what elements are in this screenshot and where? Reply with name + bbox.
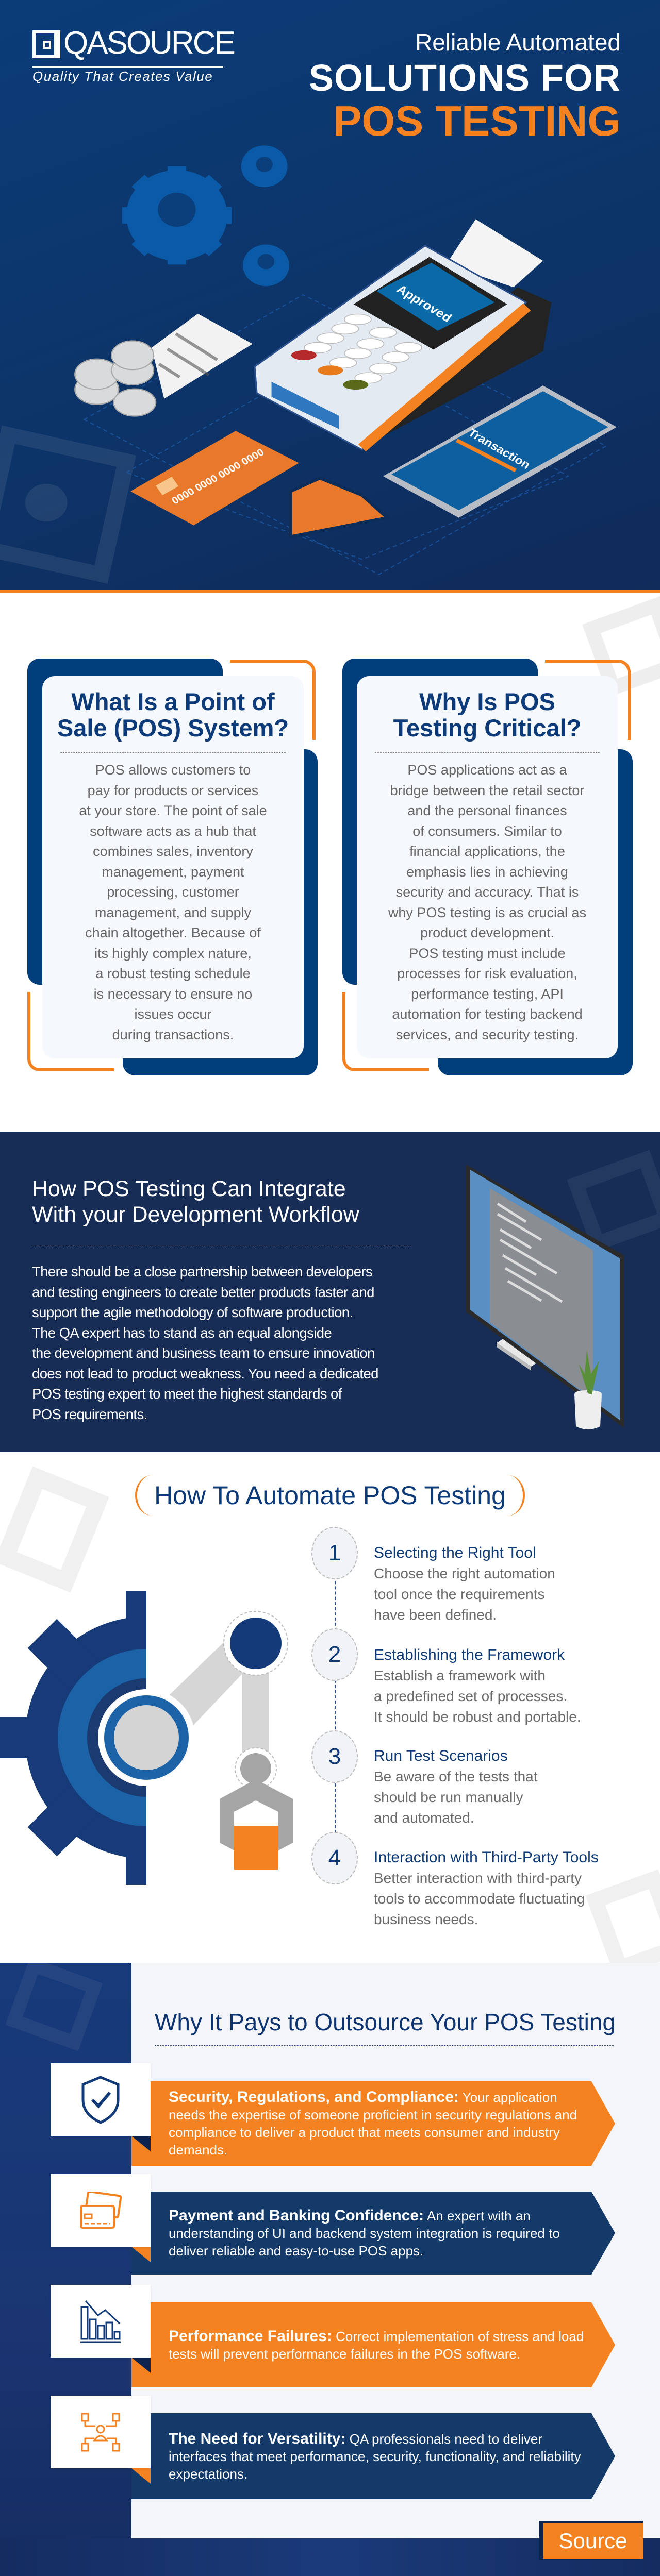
step 4: business needs. [374,1911,478,1927]
text block: why POS testing is as crucial as [388,905,586,920]
section: integrate workflow [0,1132,660,1452]
heading: Why It Pays to Outsource Your POS Testing [155,2009,616,2035]
step 1: 1 [328,1540,341,1565]
row: payment [51,2174,615,2275]
text block: a robust testing schedule [95,966,251,981]
text block: automation for testing backend [392,1006,583,1022]
text block: software acts as a hub that [90,823,256,839]
text block: issues occur [134,1006,212,1022]
step 2: Establishing the Framework [374,1646,565,1663]
row: security [51,2063,615,2166]
row: payment: Payment and Banking Confidence: An expert with an understanding of UI and backend system integration is required to deliver reliable and easy-to-use POS apps. [169,2207,560,2258]
step 1: Choose the right automation [374,1565,555,1581]
text block [32,1264,378,1422]
step 3: and automated. [374,1810,474,1826]
text block: the development and business team to ensure innovation [32,1345,375,1361]
watermark [582,596,660,697]
step 1 [311,1527,555,1623]
icon: shield check [51,2063,151,2136]
text block: processing, customer [107,884,239,900]
text block: services, and security testing. [396,1026,579,1042]
icon: network [51,2396,151,2468]
text block: and the personal finances [407,803,567,818]
text block: chain altogether. Because of [85,925,261,940]
title: POS TESTING [333,97,621,145]
step 1: have been defined. [374,1607,497,1623]
hero illustration: Approved [394,282,454,325]
logo [32,25,234,84]
receipt and coins [152,314,253,399]
text block: POS testing must include [409,945,566,961]
step 3: should be run manually [374,1789,523,1805]
step 2: 2 [328,1642,341,1667]
hero illustration: 0000 0000 0000 0000 [170,447,267,507]
step 2: a predefined set of processes. [374,1688,567,1704]
text block: product development. [420,925,554,940]
step 3: Run Test Scenarios [374,1747,508,1764]
heading: Sale (POS) System? [57,714,289,742]
phone [383,385,617,518]
text block: is necessary to ensure no [94,986,252,1002]
step 3 [311,1730,538,1826]
step 4: Interaction with Third-Party Tools [374,1849,599,1866]
step 4 [311,1832,599,1927]
logo: QASOURCE [63,25,234,61]
card [130,431,299,525]
logo: Quality That Creates Value [32,69,213,84]
text block: processes for risk evaluation, [397,966,578,981]
dashed connector [335,1555,336,1859]
text block: emphasis lies in achieving [406,864,568,879]
text block: POS applications act as a [407,762,567,778]
text block: pay for products or services [88,782,258,798]
text block: at your store. The point of sale [79,803,267,818]
heading [393,688,581,742]
POS terminal [358,287,551,450]
illustration: gear robot arm [0,1591,293,1885]
step 3: Be aware of the tests that [374,1769,538,1784]
title [309,29,621,145]
icon: cards [51,2174,151,2247]
hero illustration: Transaction [466,426,533,472]
row: performance: Performance Failures: Correct implementation of stress and load tests will prevent performance failures in the POS software. [169,2327,584,2361]
heading [32,1176,359,1227]
section: how to automate [0,1452,660,1963]
section: outsource [0,1963,660,2576]
heading: Why Is POS [419,688,555,715]
text block: management, payment [102,864,244,879]
text block: POS requirements. [32,1406,147,1422]
text block: combines sales, inventory [93,844,253,859]
heading [57,688,289,742]
text block: during transactions. [112,1026,234,1042]
step 4: Better interaction with third-party [374,1870,582,1886]
heading: With your Development Workflow [32,1202,359,1227]
text block: and testing engineers to create better products faster and [32,1284,374,1300]
step 2: Establish a framework with [374,1668,546,1683]
step 2: It should be robust and portable. [374,1709,581,1725]
panel: why POS testing critical [342,659,633,1075]
step 4: 4 [328,1845,341,1871]
text block: POS testing expert to meet the highest standards of [32,1386,342,1402]
hero illustration [0,145,617,583]
row: versatility: The Need for Versatility: QA professionals need to deliver interfaces that meet performance, security, functionality, and reliability expectations. [169,2430,581,2482]
heading [135,1475,525,1516]
step 4: tools to accommodate fluctuating [374,1891,585,1907]
section: outsource: Source [558,2529,628,2553]
shield [290,478,387,536]
title: Reliable Automated [415,29,621,56]
row: security: Security, Regulations, and Compliance: Your application needs the expertise of someone proficient in security regulations and compliance to deliver a product that meets consumer and industry demands. [169,2089,577,2158]
heading: Testing Critical? [393,714,581,742]
text block: of consumers. Similar to [412,823,562,839]
title: SOLUTIONS FOR [309,58,621,99]
text block: financial applications, the [409,844,565,859]
text block: performance testing, API [411,986,564,1002]
text block: The QA expert has to stand as an equal alongside [32,1324,332,1341]
text block [388,762,586,1042]
heading: How To Automate POS Testing [154,1481,506,1510]
icon: logo mark [32,30,60,58]
text block: There should be a close partnership between developers [32,1264,372,1279]
text block: support the agile methodology of software production. [32,1304,353,1320]
text block: management, and supply [95,905,251,920]
gears [122,145,289,286]
panel: what is POS [27,659,318,1075]
icon: monitor and plant [466,1165,624,1429]
step 1: tool once the requirements [374,1586,545,1602]
text block: does not lead to product weakness. You need a dedicated [32,1366,378,1381]
text block: bridge between the retail sector [390,782,584,798]
hero section [0,0,660,593]
text block: POS allows customers to [95,762,251,778]
text block: security and accuracy. That is [396,884,579,900]
row: performance [51,2285,615,2387]
source button [539,2521,643,2560]
heading: What Is a Point of [71,688,275,715]
row: versatility [51,2396,615,2499]
step 3: 3 [328,1744,341,1769]
text block [79,762,267,1042]
step 1: Selecting the Right Tool [374,1544,536,1561]
step 2 [311,1628,581,1725]
text block: its highly complex nature, [94,945,252,961]
heading: How POS Testing Can Integrate [32,1176,346,1201]
icon: bar chart [51,2285,151,2358]
